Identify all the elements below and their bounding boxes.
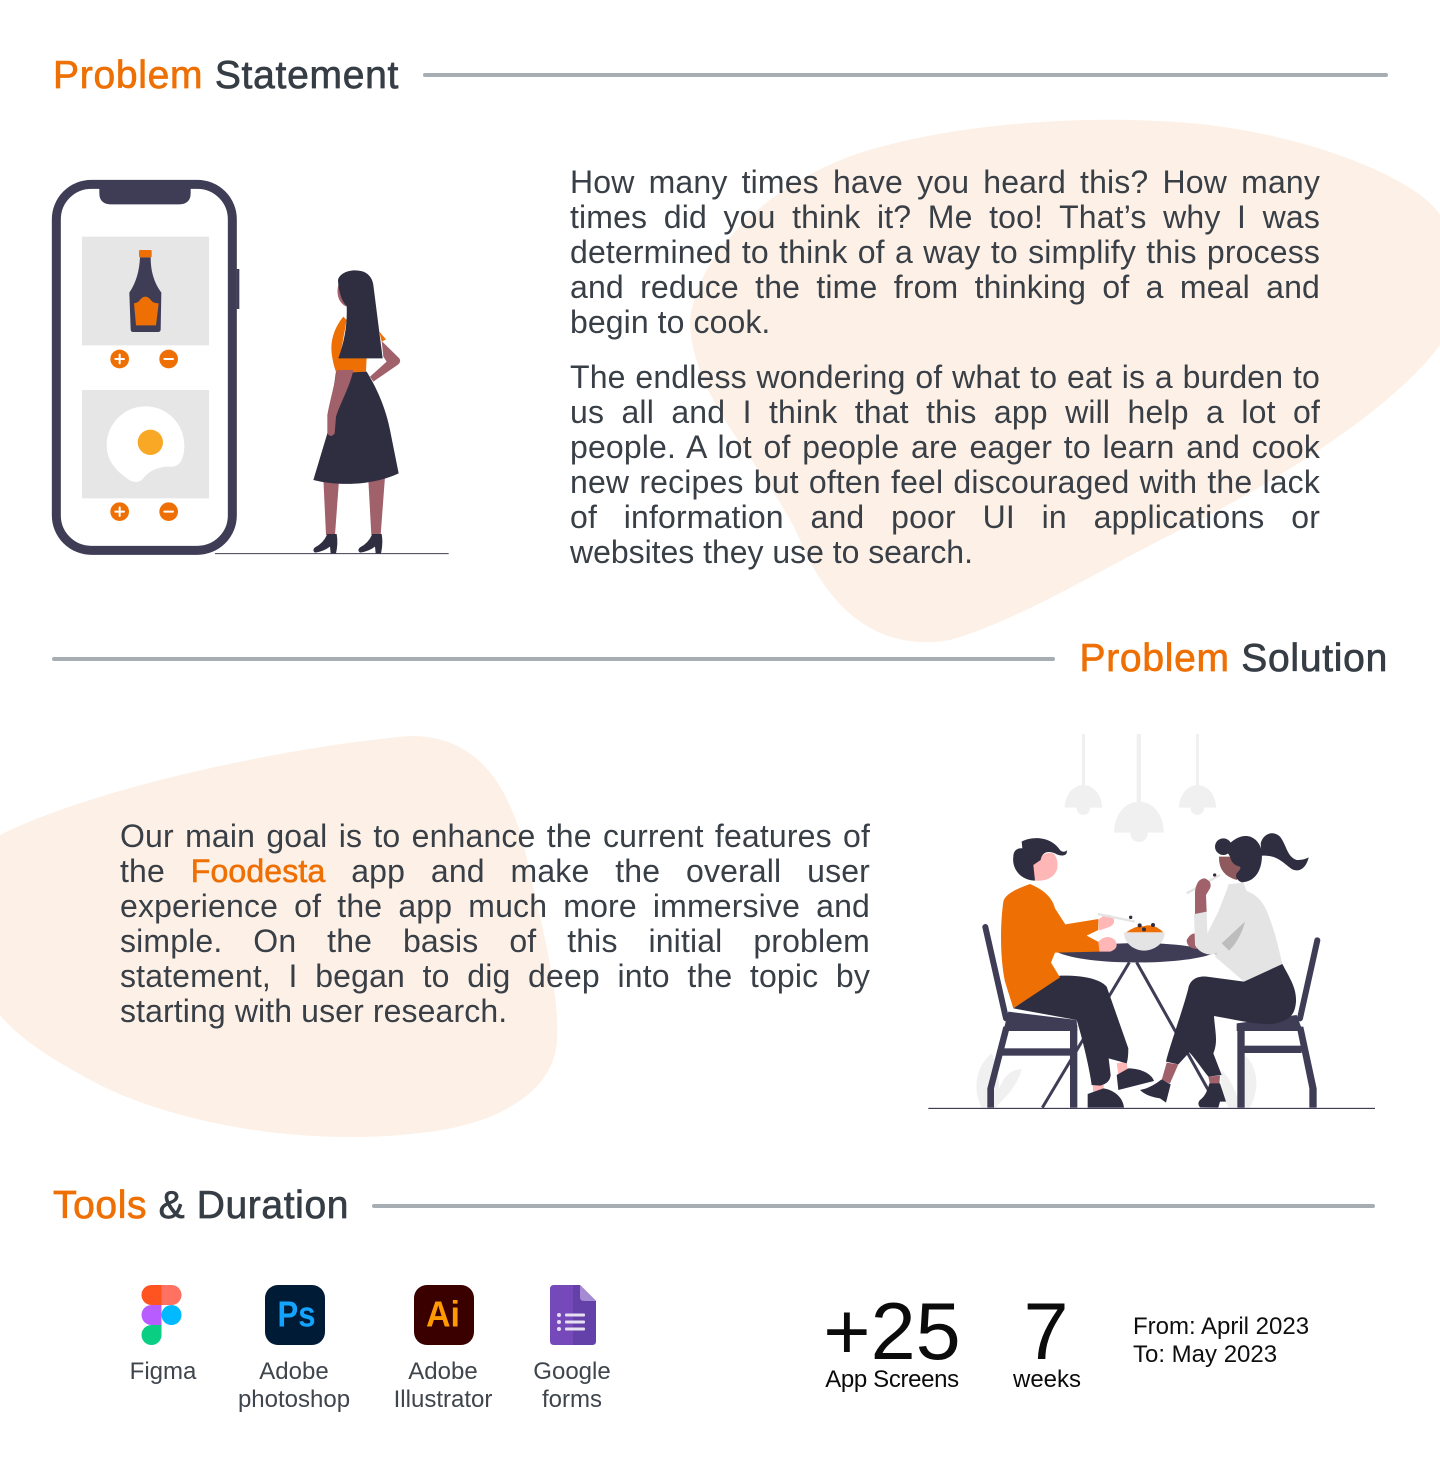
text block: problem solution: [120, 818, 870, 1029]
stat: app screens: App Screens: [825, 1366, 959, 1393]
text block: problem statement: How many times have you heard this? How many: [570, 164, 1320, 200]
icon: Google forms: [550, 1285, 596, 1345]
bowl: [1124, 923, 1165, 951]
left chair: [985, 927, 1077, 1108]
plants: [976, 1053, 1256, 1108]
text block: problem statement: determined to think of a way to simplify this process: [570, 234, 1320, 270]
icon: Adobe Photoshop: Ps: [278, 1294, 316, 1335]
stat: weeks: [1013, 1287, 1081, 1393]
text block: problem statement: [570, 164, 1320, 570]
illustration: woman: [215, 270, 449, 554]
label: Google forms: forms: [542, 1386, 602, 1413]
text block: problem statement: people. A lot of people are eager to learn and cook: [570, 429, 1320, 465]
table: [1042, 943, 1217, 1108]
heading: Problem Solution: Problem Solution: [1079, 637, 1388, 680]
label: Adobe Illustrator: Illustrator: [394, 1386, 492, 1413]
text block: problem statement: new recipes but often feel discouraged with the lack: [570, 464, 1320, 500]
illustration: couple eating at a table: [928, 734, 1375, 1109]
ground line: [928, 1108, 1375, 1109]
label: Google forms: Google: [533, 1358, 611, 1385]
lamps: [1065, 734, 1216, 842]
icon: Adobe Illustrator: Ai: [426, 1294, 460, 1335]
label: Adobe photoshop: photoshop: [238, 1386, 350, 1413]
text block: problem statement: websites they use to search.: [570, 534, 973, 570]
text block: problem statement: us all and I think that this app will help a lot of: [570, 394, 1320, 430]
right chair: [1237, 940, 1317, 1108]
icon: phone: [56, 184, 239, 550]
woman: [1140, 833, 1309, 1108]
text block: date range: From: April 2023: [1133, 1313, 1309, 1340]
label: Figma: Figma: [130, 1358, 196, 1385]
text block: problem statement: The endless wondering of what to eat is a burden to: [570, 359, 1320, 395]
stat: weeks: 7: [1023, 1287, 1069, 1377]
label: Adobe Illustrator: [394, 1358, 492, 1413]
stat: app screens: +25: [823, 1287, 961, 1377]
heading: Tools & Duration: Tools & Duration: [53, 1184, 349, 1227]
text block: problem solution: starting with user research.: [120, 993, 507, 1029]
illustration: phone and standing woman: [52, 180, 449, 555]
label: Adobe photoshop: [238, 1358, 350, 1413]
stat: weeks: weeks: [1013, 1366, 1081, 1393]
icon: Adobe Photoshop: [265, 1285, 325, 1345]
text block: date range: [1133, 1313, 1309, 1368]
label: Google forms: [533, 1358, 611, 1413]
text block: problem statement: of information and poor UI in applications or: [570, 499, 1320, 535]
text block: problem solution: experience of the app much more immersive and: [120, 888, 870, 924]
label: Adobe photoshop: Adobe: [259, 1358, 329, 1385]
text block: problem statement: times did you think it? Me too! That’s why I was: [570, 199, 1320, 235]
text block: problem statement: begin to cook.: [570, 304, 770, 340]
text block: problem solution: the Foodesta app and make the overall user: [120, 853, 870, 889]
icon: Figma: [142, 1285, 182, 1345]
label: Adobe Illustrator: Adobe: [408, 1358, 478, 1385]
text block: problem solution: simple. On the basis of this initial problem: [120, 923, 870, 959]
text block: problem statement: and reduce the time from thinking of a meal and: [570, 269, 1320, 305]
icon: Adobe Illustrator: [414, 1285, 474, 1345]
man: [1001, 838, 1154, 1108]
heading: Problem Statement: Problem Statement: [53, 54, 399, 97]
text block: date range: To: May 2023: [1133, 1341, 1277, 1368]
text block: problem solution: Our main goal is to enhance the current features of: [120, 818, 870, 854]
text block: problem solution: statement, I began to dig deep into the topic by: [120, 958, 870, 994]
